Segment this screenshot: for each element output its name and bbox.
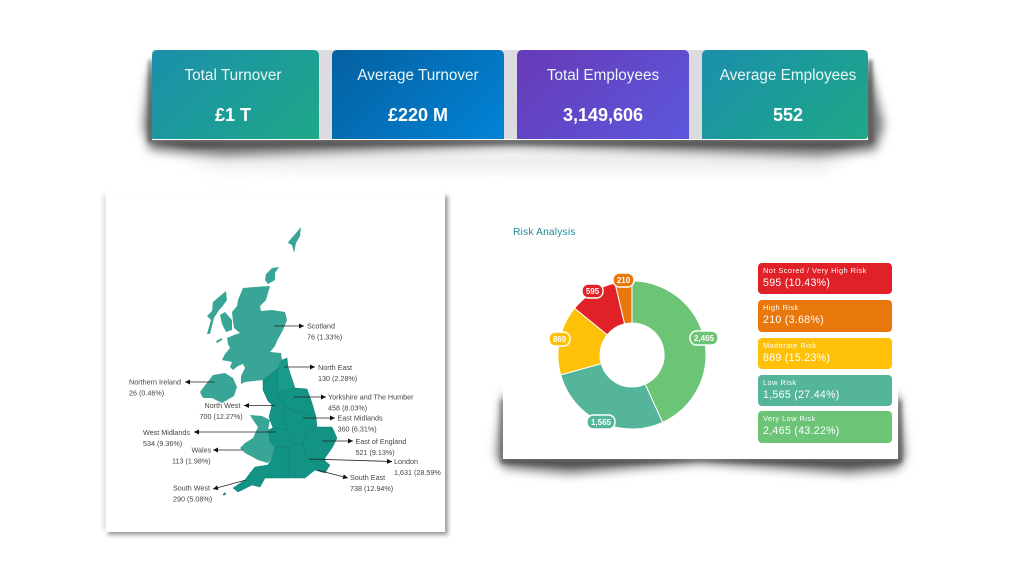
arrows [185, 326, 392, 489]
card: average employees: Average Employees [720, 67, 856, 84]
card: total employees [517, 50, 689, 139]
region labels: 738 (12.94%) [350, 484, 393, 493]
region labels: 1,631 (28.59% [394, 468, 441, 477]
donut value pills: 869 [553, 335, 567, 344]
map: Wales [240, 415, 275, 463]
region labels: Northern Ireland [129, 378, 181, 386]
legend: very low risk: 2,465 (43.22%) [763, 425, 840, 437]
region labels: 700 (12.27%) [200, 412, 243, 421]
region labels: 113 (1.98%) [172, 456, 211, 466]
card: average turnover: Average Turnover [357, 67, 479, 84]
card: average employees [702, 50, 868, 139]
region labels: 458 (8.03%) [328, 404, 367, 412]
region labels: Wales [192, 446, 212, 454]
legend: low risk: Low Risk [763, 378, 797, 387]
region labels: West Midlands [143, 428, 190, 437]
legend: low risk: 1,565 (27.44%) [763, 389, 840, 401]
region labels: 130 (2.28%) [318, 374, 357, 383]
legend: high risk [758, 300, 892, 332]
legend: very low risk: Very Low Risk [763, 414, 816, 423]
legend: not scored / very high risk [758, 263, 892, 294]
legend: moderate risk [758, 338, 892, 369]
card: total turnover [152, 50, 319, 139]
map: Scotland [207, 227, 301, 384]
donut value pills: 595 [586, 287, 600, 296]
region labels: North West [204, 401, 240, 410]
region labels [129, 322, 441, 504]
legend: not scored / very high risk: Not Scored / Very High Risk [763, 266, 867, 275]
card: total turnover: £1 T [215, 105, 251, 125]
card: average turnover [332, 50, 504, 139]
donut value pills: 210 [617, 276, 631, 285]
donut value pills [549, 273, 718, 429]
region labels: South West [173, 484, 210, 492]
region labels: East Midlands [338, 414, 383, 422]
slice: very low risk [632, 281, 706, 422]
panel: UK regions map [106, 193, 445, 532]
legend: moderate risk: Moderate Risk [763, 341, 816, 350]
map: Northern Ireland [200, 373, 237, 403]
slice: moderate risk [558, 308, 607, 375]
panel: risk analysis [503, 208, 898, 459]
region labels: Scotland [307, 322, 335, 330]
card: total turnover: Total Turnover [185, 67, 281, 84]
region labels: London [394, 457, 418, 466]
legend: not scored / very high risk: 595 (10.43%) [763, 277, 830, 289]
region labels: South East [350, 473, 385, 482]
panel: KPI strip background [152, 50, 868, 140]
card: total employees: 3,149,606 [563, 105, 643, 125]
legend: high risk: 210 (3.68%) [763, 314, 824, 326]
region labels: Yorkshire and The Humber [328, 392, 414, 402]
card: average employees: 552 [773, 105, 803, 125]
region labels: North East [318, 363, 352, 372]
legend: high risk: High Risk [763, 303, 799, 312]
donut value pills: 1,565 [591, 418, 612, 427]
region labels: 521 (9.13%) [356, 448, 395, 457]
slice: not scored / very high risk [575, 283, 625, 335]
slice: low risk [561, 364, 663, 429]
region labels: 534 (9.36%) [143, 439, 182, 448]
legend: very low risk [758, 411, 892, 443]
region labels: 290 (5.08%) [173, 494, 212, 504]
region labels: 360 (6.31%) [338, 424, 377, 434]
region labels: 76 (1.33%) [307, 332, 342, 342]
legend: low risk [758, 375, 892, 406]
card: total employees: Total Employees [547, 67, 659, 84]
card: average turnover: £220 M [388, 105, 448, 125]
map: England regions [223, 358, 337, 495]
slice: high risk [615, 281, 632, 324]
region labels: East of England [356, 437, 406, 446]
donut value pills: 2,465 [694, 334, 715, 343]
heading: risk analysis: Risk Analysis [513, 227, 576, 238]
region labels: 26 (0.46%) [129, 388, 164, 398]
legend: moderate risk: 869 (15.23%) [763, 352, 830, 364]
